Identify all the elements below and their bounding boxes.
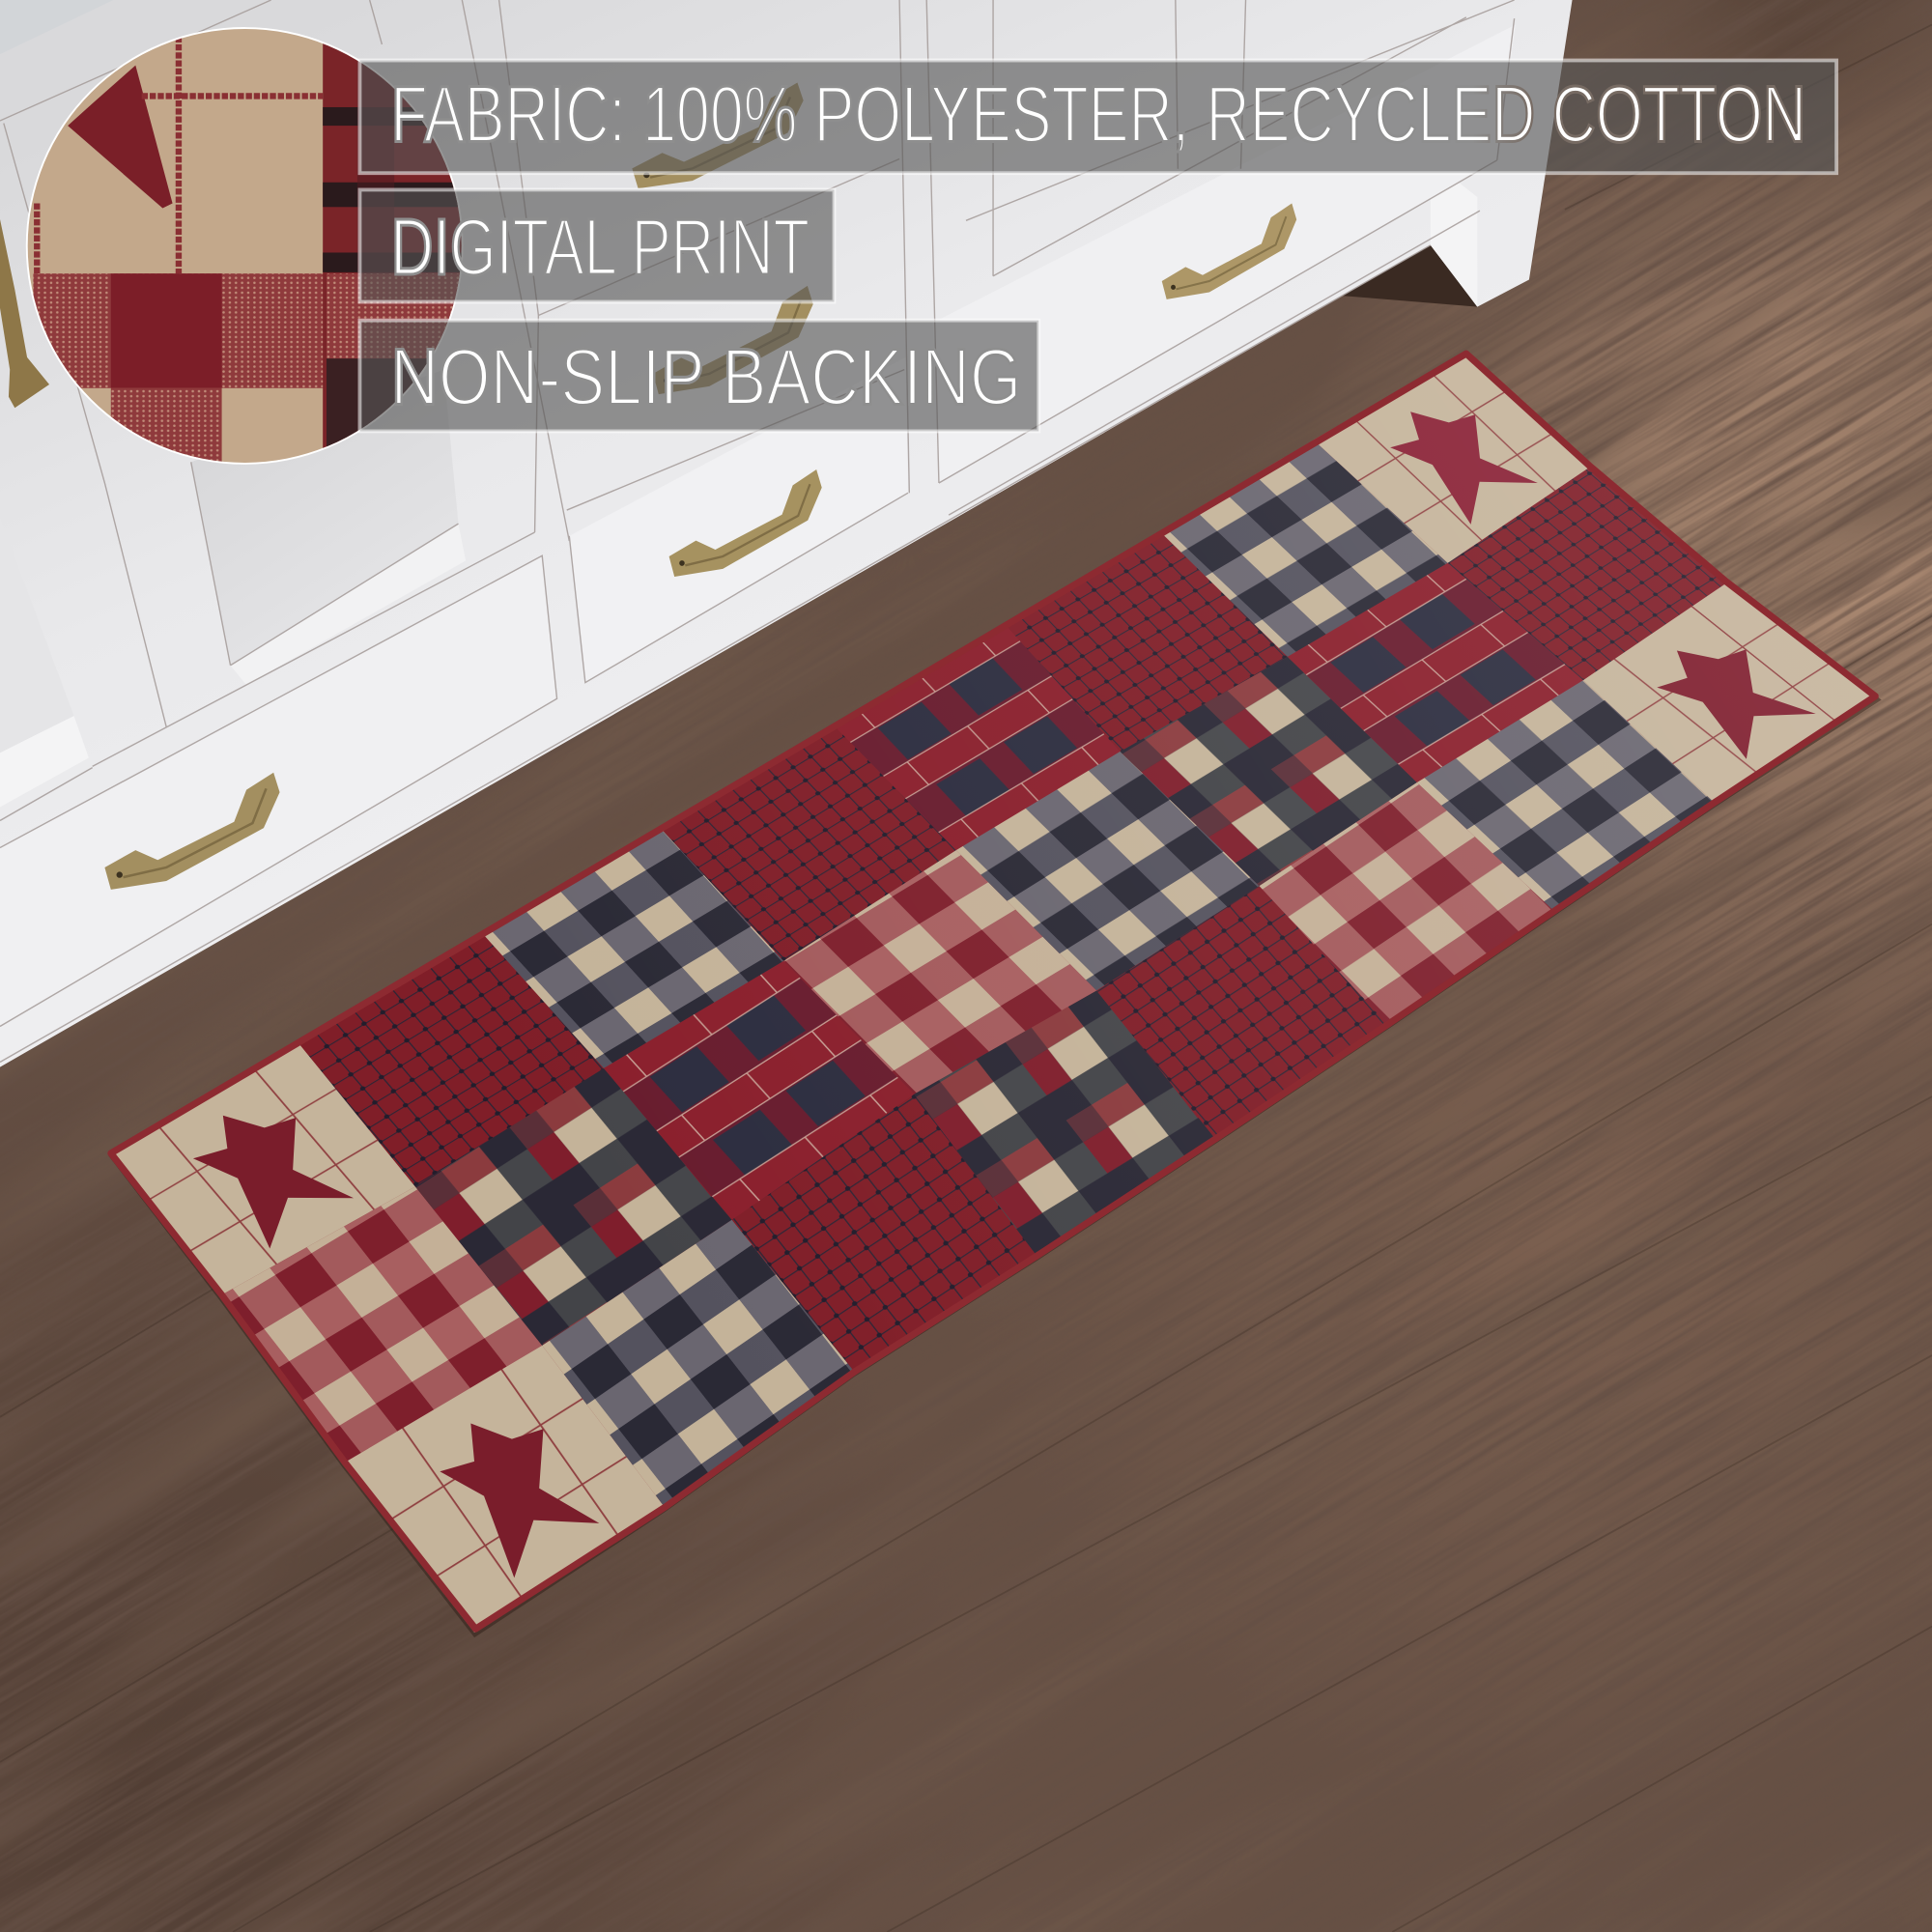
patch: red check — [783, 850, 1096, 1094]
patch: plaid — [1448, 466, 1729, 680]
handle: left door — [0, 219, 49, 408]
patch: window pane — [604, 961, 914, 1220]
rug serged border — [111, 354, 1875, 1629]
patch: far star end bottom — [1583, 582, 1879, 804]
fabric lower mixed band — [111, 388, 222, 464]
handle: bottom drawer — [104, 773, 280, 890]
label: digital print: DIGITAL PRINT — [390, 202, 810, 292]
patch: mixed check — [1120, 657, 1417, 886]
patch: plaid — [1096, 886, 1389, 1140]
patch: navy check — [542, 1220, 855, 1508]
fabric base — [27, 28, 462, 464]
patch: navy check — [1417, 680, 1716, 912]
brass handles — [0, 83, 1296, 890]
patch: plaid — [659, 724, 956, 961]
patch: plaid — [1005, 531, 1288, 752]
patch: window pane — [833, 623, 1120, 850]
label: non-slip backing: NON-SLIP BACKING — [390, 331, 1021, 421]
patchwork runner rug — [108, 352, 1882, 1637]
rug lighting wash — [108, 352, 1879, 1633]
fabric star tip — [68, 66, 173, 209]
patch: top star end — [108, 1041, 415, 1296]
handle: middle drawer — [669, 469, 822, 577]
patch: navy check — [482, 827, 783, 1068]
patch: plaid — [732, 1094, 1037, 1373]
cabinet shadow on floor — [1282, 245, 1477, 308]
fabric right stripe — [323, 28, 462, 464]
rug shadow — [108, 355, 1882, 1637]
patch: window pane — [1288, 563, 1583, 782]
fabric mixed check band — [33, 273, 329, 388]
label: digital print — [359, 189, 835, 301]
patch: red check — [1260, 782, 1555, 1025]
fabric red square — [111, 273, 222, 388]
patch: bottom star end — [343, 1346, 666, 1633]
fabric magnifier circle — [26, 27, 464, 465]
patch: plaid — [297, 933, 604, 1186]
fabric thin check lines — [37, 28, 323, 273]
white cabinet — [0, 0, 1573, 1067]
handle: upper drawer two — [653, 286, 813, 394]
patch: red check — [219, 1186, 542, 1463]
patch: navy check — [956, 752, 1260, 991]
rug body — [108, 352, 1879, 1633]
patch: mixed check — [914, 991, 1216, 1257]
patch: navy check — [1159, 440, 1448, 657]
handle: upper drawer one — [632, 83, 804, 188]
patch: mixed check — [415, 1068, 732, 1346]
patch: far star end top — [1314, 352, 1592, 563]
handle: right drawer — [1162, 204, 1296, 299]
label: non-slip backing — [359, 321, 1038, 431]
